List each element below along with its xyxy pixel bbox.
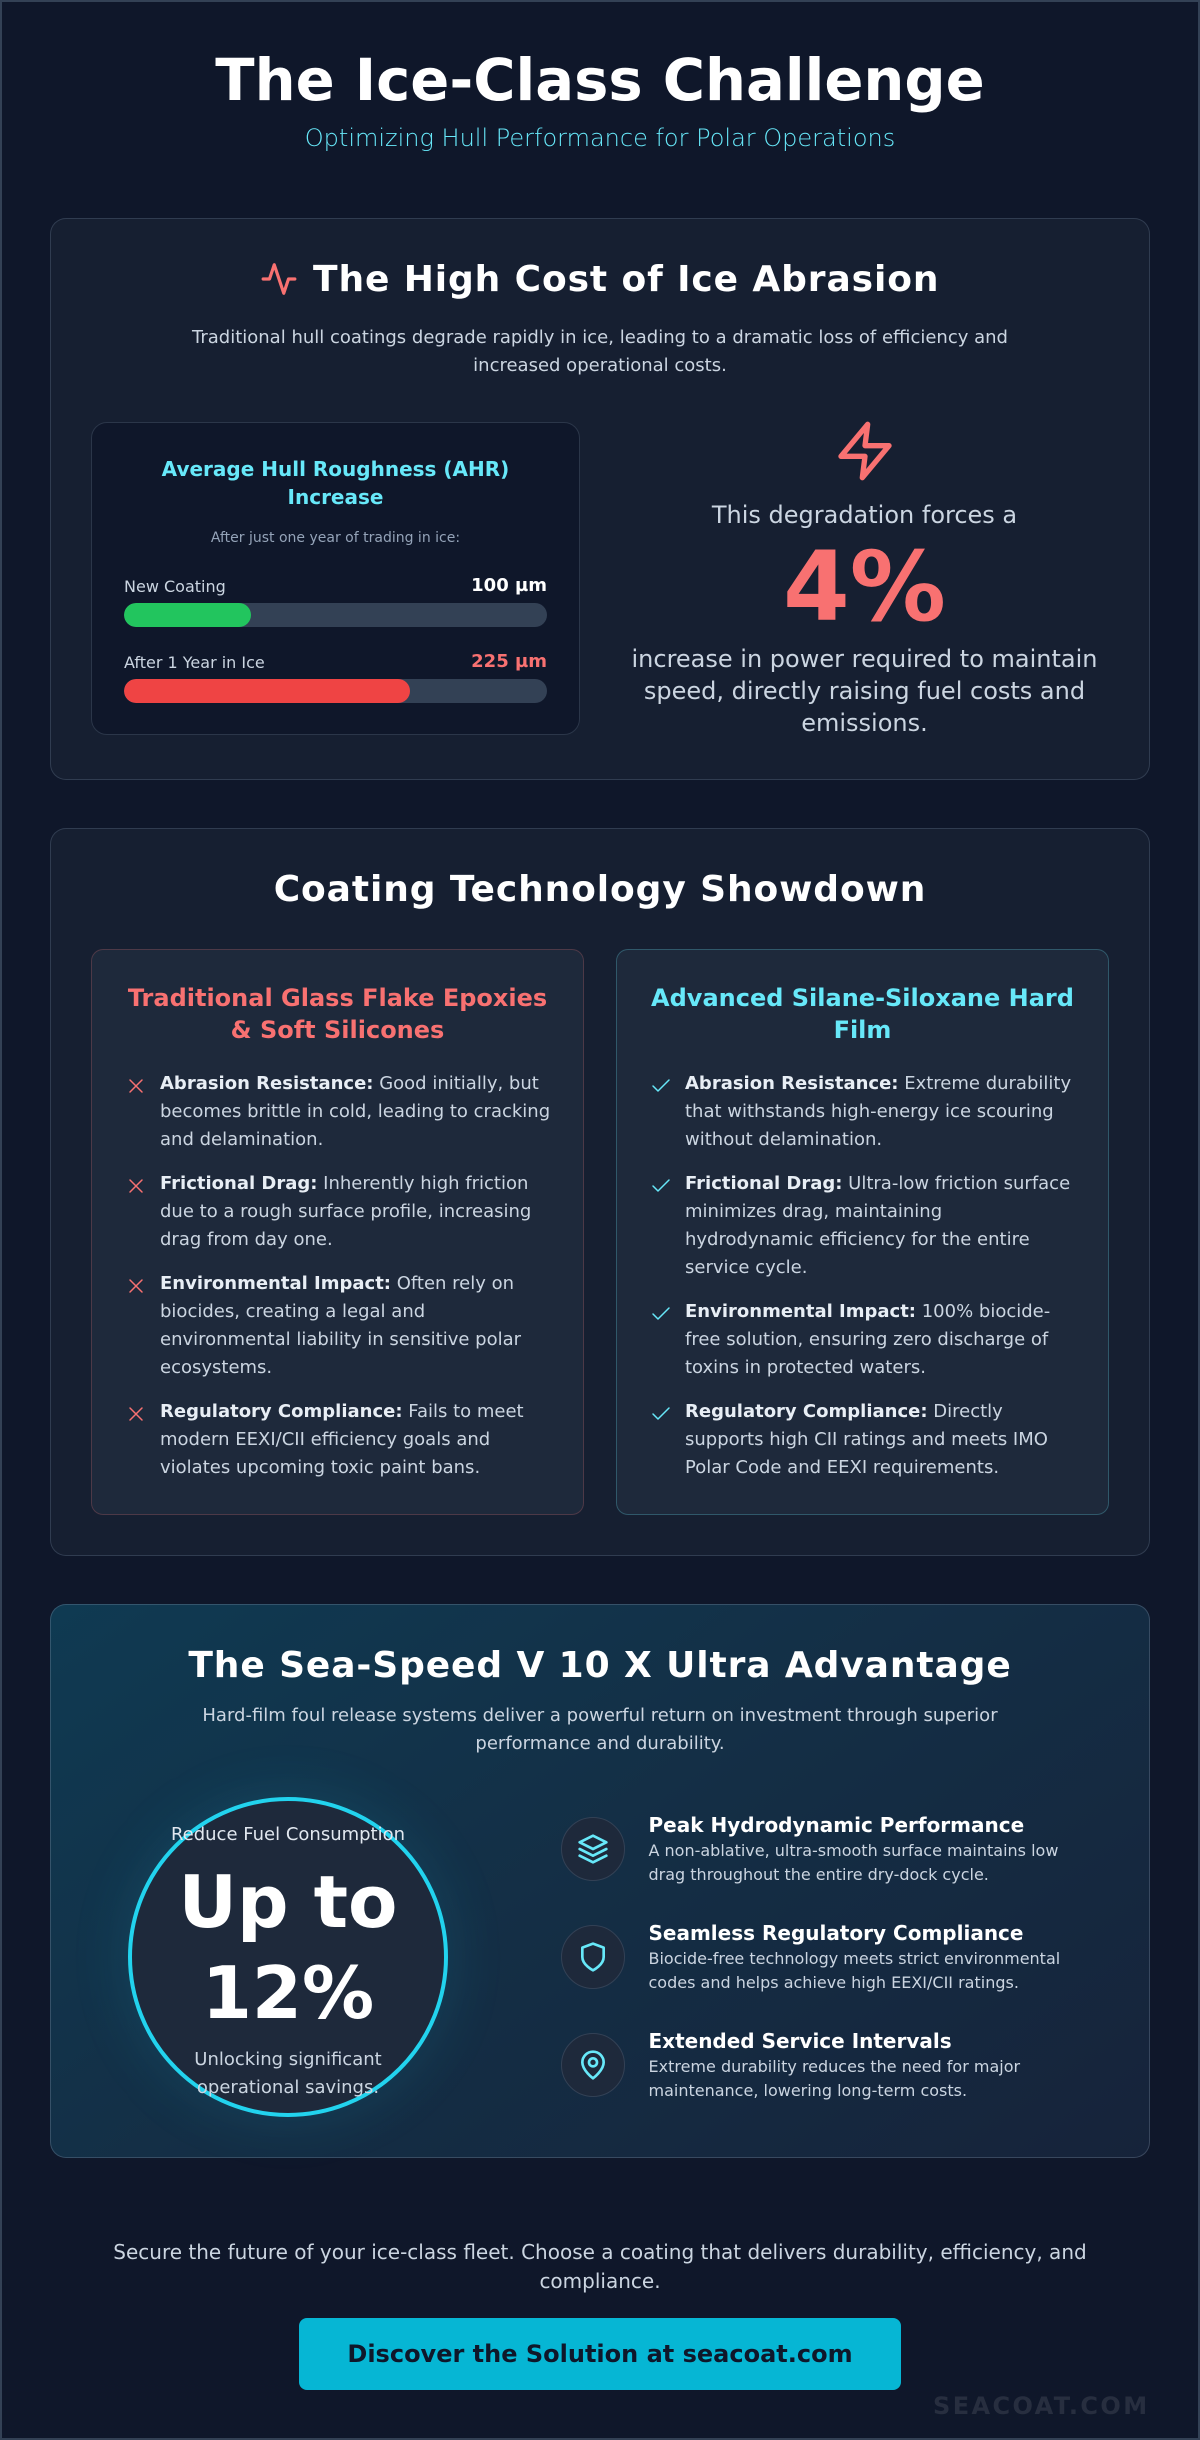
feature: hydrodynamic performance — [561, 1813, 1058, 1884]
intro text — [192, 327, 1008, 376]
feature text: Extreme durability reduces the need for major — [648, 2057, 1020, 2076]
callout body text: speed, directly raising fuel costs and — [644, 677, 1085, 705]
call to action text — [113, 2240, 1087, 2293]
feature title: Extended Service Intervals — [648, 2029, 952, 2053]
feature text: codes and helps achieve high EEXI/CII ratings. — [648, 1973, 1019, 1992]
title: The Ice-Class Challenge — [215, 47, 985, 114]
item: environmental impact: biocides, creating a legal and — [160, 1301, 425, 1322]
item: regulatory compliance: supports high CII ratings and meets IMO — [685, 1429, 1048, 1450]
feature text: Biocide-free technology meets strict environmental — [648, 1949, 1060, 1968]
item: abrasion resistance — [129, 1073, 550, 1150]
chart heading: Increase — [288, 485, 383, 509]
item: environmental impact: free solution, ensuring zero discharge of — [685, 1329, 1048, 1350]
item: abrasion resistance: becomes brittle in cold, leading to cracking — [160, 1101, 550, 1122]
item: environmental impact: toxins in protected waters. — [685, 1357, 926, 1378]
feature text — [648, 1949, 1060, 1992]
feature text: drag throughout the entire dry-dock cycle. — [648, 1865, 989, 1884]
stat caption — [194, 2048, 382, 2098]
feature: service intervals — [561, 2029, 1020, 2100]
item: environmental impact: environmental liability in sensitive polar — [160, 1329, 521, 1350]
icon: activity pulse — [262, 263, 296, 295]
feature: regulatory compliance — [561, 1921, 1060, 1992]
subtitle: Optimizing Hull Performance for Polar Operations — [305, 124, 895, 152]
item: regulatory compliance: Regulatory Compliance: Fails to meet — [160, 1401, 524, 1422]
label: after 1 year: After 1 Year in Ice — [124, 653, 265, 672]
item: abrasion resistance: and delamination. — [160, 1129, 323, 1150]
item: frictional drag: Frictional Drag: Inherently high friction — [160, 1173, 528, 1194]
item: abrasion resistance: without delamination. — [685, 1129, 882, 1150]
intro text: Traditional hull coatings degrade rapidly in ice, leading to a dramatic loss of efficiency and — [192, 327, 1008, 348]
panel: coating technology showdown — [50, 828, 1150, 1556]
item: frictional drag — [652, 1173, 1070, 1278]
item: regulatory compliance: Regulatory Compliance: Directly — [685, 1401, 1003, 1422]
icon: map pin — [561, 2033, 625, 2097]
item: regulatory compliance: modern EEXI/CII efficiency goals and — [160, 1429, 490, 1450]
chart subtitle: After just one year of trading in ice: — [211, 530, 460, 546]
item: frictional drag — [129, 1173, 531, 1250]
bar: after 1 year — [124, 679, 547, 703]
callout body text: emissions. — [801, 709, 928, 737]
item: frictional drag: due to a rough surface profile, increasing — [160, 1201, 531, 1222]
stat value: 12% — [202, 1951, 374, 2035]
traditional heading: & Soft Silicones — [231, 1016, 444, 1044]
traditional heading — [128, 984, 547, 1044]
callout body text: increase in power required to maintain — [632, 645, 1097, 673]
stat label: Reduce Fuel Consumption — [171, 1824, 405, 1845]
stat circle: fuel savings — [128, 1797, 448, 2117]
advantage intro text: Hard-film foul release systems deliver a powerful return on investment through superior — [202, 1705, 998, 1726]
callout lead text: This degradation forces a — [712, 501, 1017, 529]
item: environmental impact: Environmental Impact: Often rely on — [160, 1273, 514, 1294]
panel: sea-speed advantage — [50, 1604, 1150, 2158]
item: abrasion resistance: that withstands high-energy ice scouring — [685, 1101, 1054, 1122]
big number: 4% — [783, 531, 946, 643]
item: frictional drag: Frictional Drag: Ultra-low friction surface — [685, 1173, 1070, 1194]
panel: high cost of ice abrasion — [50, 218, 1150, 780]
panel: traditional coatings — [91, 949, 584, 1515]
panel: hull roughness chart — [91, 422, 580, 735]
watermark: SEACOAT.COM — [933, 2392, 1150, 2420]
feature text: maintenance, lowering long-term costs. — [648, 2081, 967, 2100]
item: regulatory compliance: violates upcoming toxic paint bans. — [160, 1457, 480, 1478]
chart heading — [162, 457, 509, 509]
intro text: increased operational costs. — [473, 355, 727, 376]
chart heading: Average Hull Roughness (AHR) — [162, 457, 509, 481]
item: abrasion resistance: Abrasion Resistance: Extreme durability — [685, 1073, 1071, 1094]
stat value: Up to — [179, 1860, 397, 1944]
value: 225 um: 225 µm — [471, 651, 547, 672]
item: abrasion resistance — [652, 1073, 1071, 1150]
advanced heading: Film — [834, 1016, 891, 1044]
call to action text: Secure the future of your ice-class fleet. Choose a coating that delivers durability, efficiency, and — [113, 2240, 1087, 2264]
call to action button — [299, 2318, 901, 2390]
item: regulatory compliance: Polar Code and EEXI requirements. — [685, 1457, 999, 1478]
item: environmental impact — [129, 1273, 521, 1378]
call to action text: compliance. — [539, 2269, 661, 2293]
icon: lightning bolt — [838, 422, 892, 480]
stat caption: operational savings. — [197, 2076, 379, 2098]
item: regulatory compliance — [129, 1401, 524, 1478]
advanced heading: Advanced Silane-Siloxane Hard — [651, 984, 1074, 1012]
item: environmental impact: ecosystems. — [160, 1357, 272, 1378]
item: environmental impact — [652, 1301, 1050, 1378]
callout: 4 percent power increase — [632, 422, 1097, 737]
advantage intro text — [202, 1705, 998, 1754]
feature text — [648, 1841, 1058, 1884]
icon: layers — [561, 1817, 625, 1881]
item: frictional drag: minimizes drag, maintaining — [685, 1201, 942, 1222]
label: new coating: New Coating — [124, 577, 226, 596]
item: environmental impact: Environmental Impact: 100% biocide- — [685, 1301, 1050, 1322]
feature title: Seamless Regulatory Compliance — [648, 1921, 1023, 1945]
icon: shield — [561, 1925, 625, 1989]
call to action button: Discover the Solution at seacoat.com — [347, 2340, 853, 2368]
item: abrasion resistance: Abrasion Resistance: Good initially, but — [160, 1073, 539, 1094]
item: frictional drag: hydrodynamic efficiency for the entire — [685, 1229, 1030, 1250]
heading: advantage: The Sea-Speed V 10 X Ultra Advantage — [188, 1644, 1012, 1686]
feature text: A non-ablative, ultra-smooth surface maintains low — [648, 1841, 1058, 1860]
advanced heading — [651, 984, 1074, 1044]
item: frictional drag: service cycle. — [685, 1257, 807, 1278]
panel: advanced hard film — [616, 949, 1109, 1515]
feature text — [648, 2057, 1020, 2100]
advantage intro text: performance and durability. — [475, 1733, 725, 1754]
traditional heading: Traditional Glass Flake Epoxies — [128, 984, 547, 1012]
item: frictional drag: drag from day one. — [160, 1229, 333, 1250]
bar: new coating — [124, 603, 547, 627]
callout body text — [632, 645, 1097, 737]
heading: showdown: Coating Technology Showdown — [274, 868, 926, 910]
header — [215, 47, 985, 152]
item: regulatory compliance — [652, 1401, 1048, 1478]
stat caption: Unlocking significant — [194, 2048, 382, 2070]
value: 100 um: 100 µm — [471, 575, 547, 596]
heading: high cost: The High Cost of Ice Abrasion — [313, 259, 939, 300]
stat value — [179, 1860, 397, 2035]
feature title: Peak Hydrodynamic Performance — [648, 1813, 1024, 1837]
